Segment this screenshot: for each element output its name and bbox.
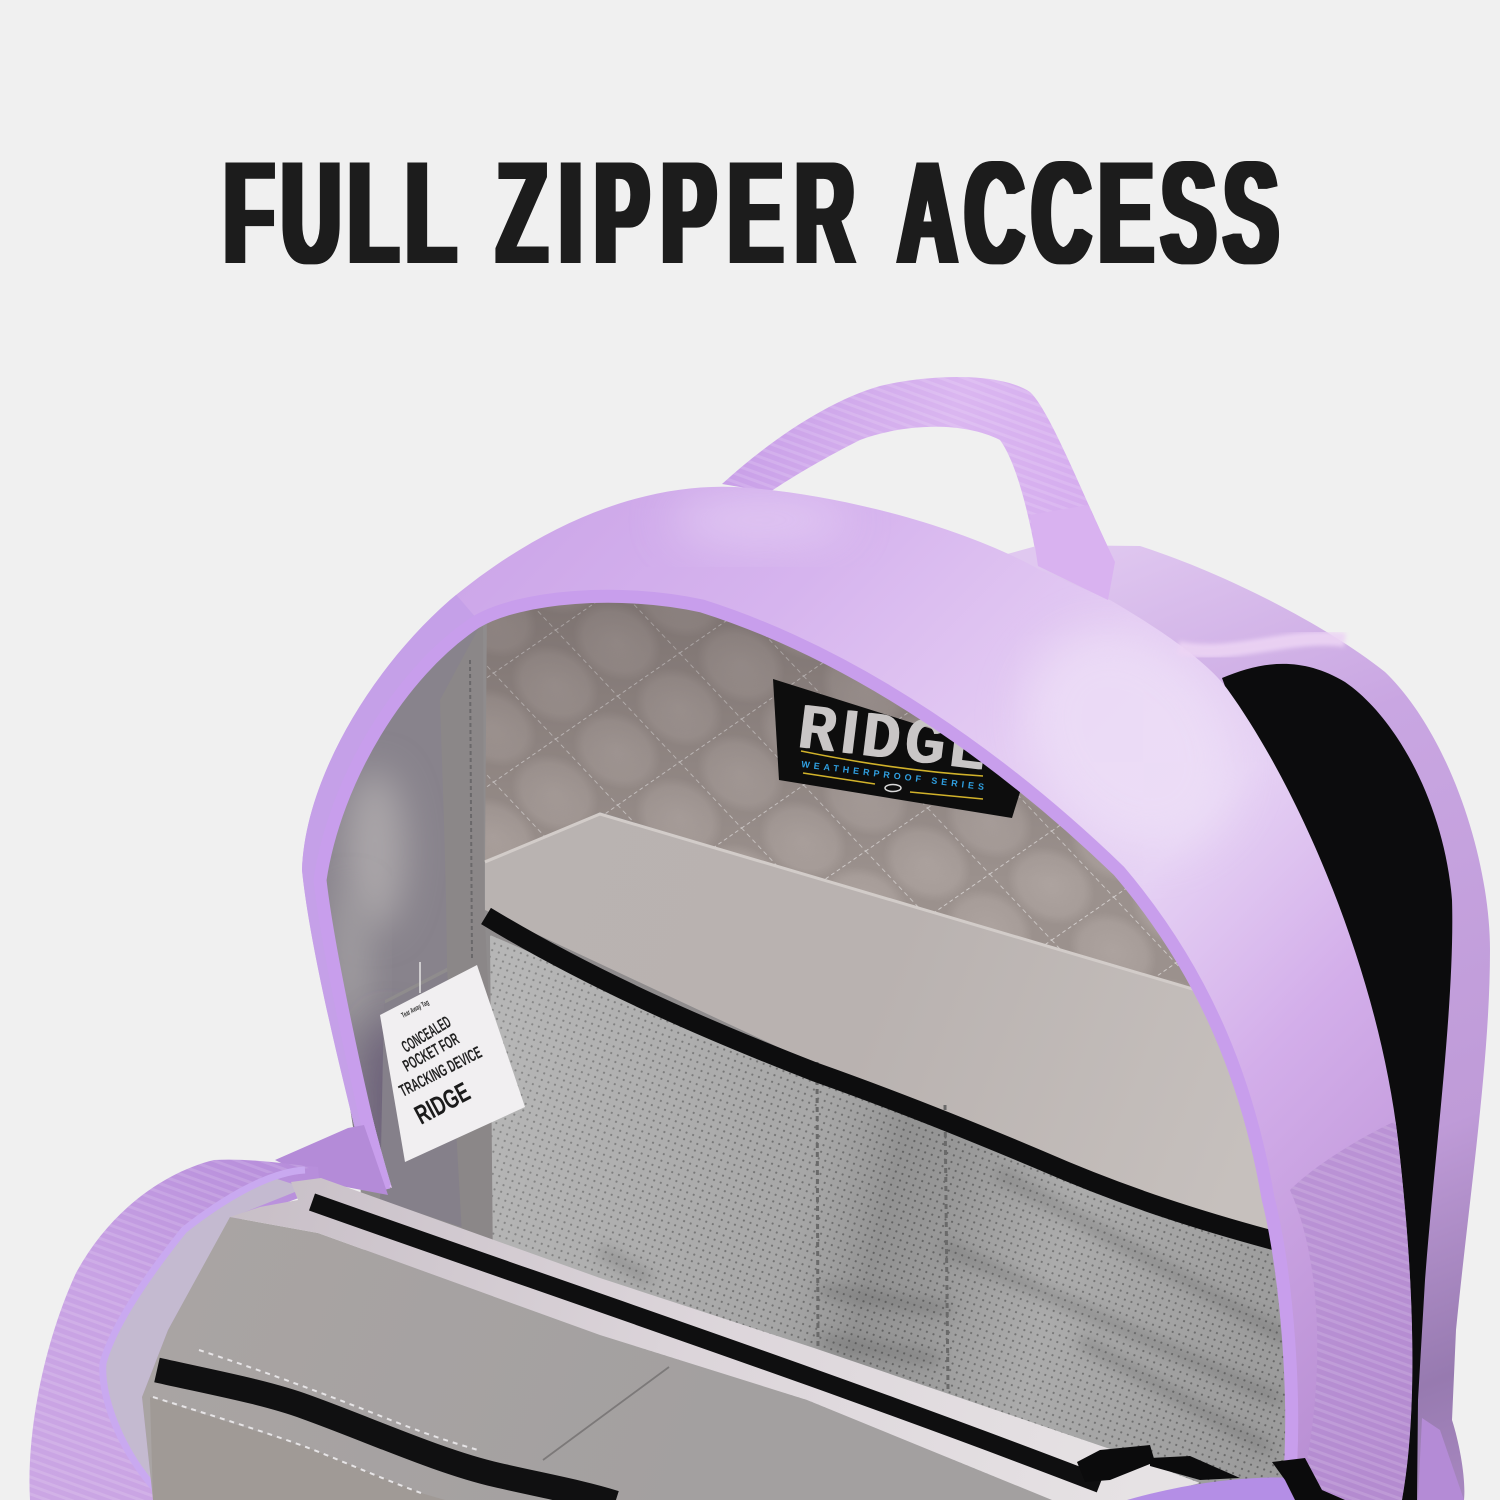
flap inner lavender facing bbox=[105, 1176, 305, 1500]
tag paper bbox=[380, 965, 525, 1162]
top carry handle bbox=[722, 377, 1108, 546]
lower left pocket bbox=[380, 972, 462, 1227]
backpack illustration bbox=[29, 377, 1490, 1500]
label stitching bbox=[801, 751, 983, 799]
title: ACCESS bbox=[898, 132, 1278, 295]
sleeve top highlight bbox=[485, 814, 1196, 990]
grey side seam bbox=[440, 620, 500, 1240]
interior base bbox=[360, 624, 782, 1296]
woven brand label bbox=[773, 679, 1030, 818]
title bbox=[224, 132, 1278, 295]
mesh pocket divider stitching bbox=[817, 1062, 948, 1390]
laptop sleeve panel bbox=[485, 816, 1268, 1229]
title: FULL bbox=[224, 132, 456, 295]
inner pocket zipper bbox=[157, 1370, 615, 1500]
bottom right trim bbox=[1127, 1477, 1335, 1500]
rear shell corner behind flap bbox=[275, 1125, 388, 1195]
main shell band bbox=[302, 487, 1412, 1500]
flap piping bbox=[103, 1170, 305, 1500]
label logo bbox=[885, 784, 901, 792]
front flap shell bbox=[29, 1160, 320, 1500]
seam stitching bbox=[470, 660, 472, 960]
tag text line 1: CONCEALED bbox=[398, 1012, 454, 1056]
left silk lining bbox=[326, 629, 478, 1149]
flap zipper tape bbox=[230, 1178, 1200, 1500]
front flap lining bbox=[142, 1217, 1052, 1500]
right outer shell bbox=[1000, 545, 1490, 1500]
seam highlight on shoulder bbox=[1178, 639, 1345, 651]
flap zipper teeth bbox=[312, 1202, 1100, 1484]
label background bbox=[773, 679, 1030, 818]
tag string bbox=[419, 962, 421, 993]
zipper edge binding bbox=[320, 596, 1292, 1500]
mesh pocket shading bbox=[490, 935, 1310, 1500]
label subtitle: WEATHERPROOF SERIES bbox=[801, 759, 985, 792]
tag text line 2: POCKET FOR bbox=[400, 1029, 462, 1075]
quilt top shadow bbox=[486, 602, 1060, 828]
handle foot over band bbox=[1035, 538, 1115, 600]
lining fold bbox=[543, 1367, 669, 1460]
mesh pocket bbox=[490, 935, 1310, 1500]
silk highlights bbox=[345, 770, 405, 930]
tag text line 3: TRACKING DEVICE bbox=[396, 1043, 485, 1101]
black pocket zipper bbox=[486, 916, 1310, 1250]
mesh fold shadows bbox=[600, 1173, 1290, 1450]
tag wordmark: RIDGE bbox=[410, 1077, 475, 1130]
title: ZIPPER bbox=[497, 132, 854, 295]
tear away text: Tear Away Tag bbox=[400, 998, 431, 1020]
right strap ends bbox=[1418, 1418, 1464, 1500]
care tag bbox=[380, 962, 525, 1162]
black back panel bbox=[1222, 664, 1452, 1500]
label wordmark: RIDGE bbox=[796, 691, 989, 783]
band sheen and shading bbox=[314, 494, 1412, 1500]
quilted back wall bbox=[485, 603, 1190, 987]
zipper pulls bbox=[1077, 1445, 1345, 1500]
zipper stitching bbox=[153, 1350, 478, 1493]
lower pocket lining bbox=[150, 1397, 445, 1500]
